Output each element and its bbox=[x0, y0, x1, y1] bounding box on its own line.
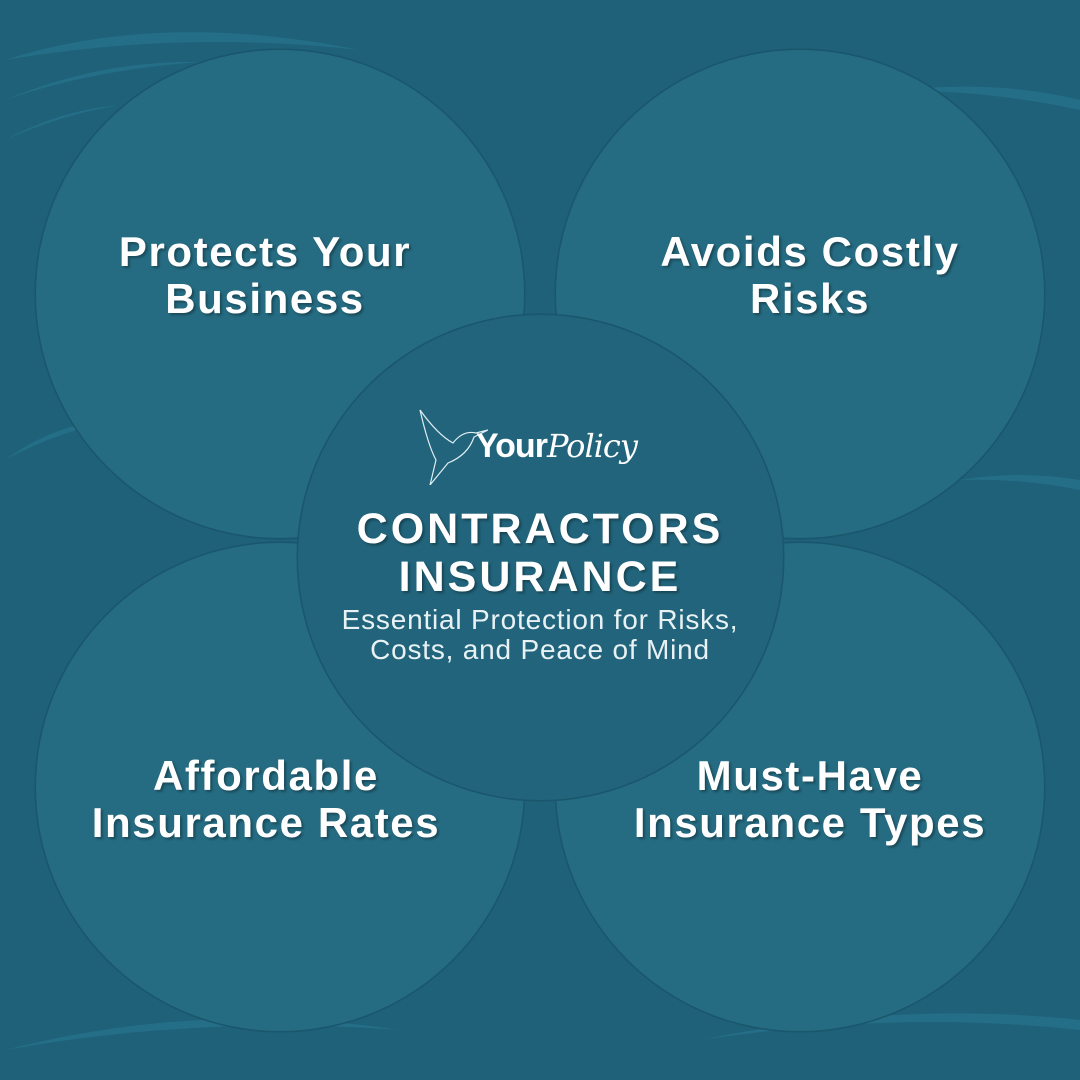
heading: affordable insurance rates: Insurance Rates bbox=[92, 799, 440, 846]
heading: must-have insurance types: Must-Have bbox=[697, 752, 923, 799]
heading: avoids costly risks: Risks bbox=[750, 275, 870, 322]
heading: avoids costly risks bbox=[660, 228, 960, 322]
title: INSURANCE bbox=[399, 553, 681, 601]
circle: protects your business bbox=[36, 50, 524, 538]
heading: protects your business: Business bbox=[165, 275, 365, 322]
circle: must-have types bbox=[556, 543, 1044, 1031]
center circle bbox=[298, 315, 783, 800]
heading: must-have insurance types: Insurance Types bbox=[634, 799, 986, 846]
heading: protects your business bbox=[119, 228, 412, 322]
text: YourPolicy: YourPolicy bbox=[476, 427, 637, 465]
heading: must-have insurance types bbox=[634, 752, 986, 848]
title bbox=[357, 505, 723, 601]
subtitle: Costs, and Peace of Mind bbox=[370, 634, 710, 665]
circle: avoids costly risks bbox=[556, 50, 1044, 538]
subtitle: Essential Protection for Risks, bbox=[342, 604, 738, 635]
heading: protects your business: Protects Your bbox=[119, 228, 411, 275]
heading: affordable insurance rates: Affordable bbox=[153, 752, 379, 799]
logo bbox=[419, 410, 638, 485]
subtitle bbox=[342, 604, 738, 665]
title: CONTRACTORS bbox=[357, 505, 723, 553]
circle: affordable rates bbox=[36, 543, 524, 1031]
icon: hummingbird bbox=[419, 410, 488, 485]
heading: avoids costly risks: Avoids Costly bbox=[660, 228, 960, 275]
heading: affordable insurance rates bbox=[92, 752, 440, 846]
